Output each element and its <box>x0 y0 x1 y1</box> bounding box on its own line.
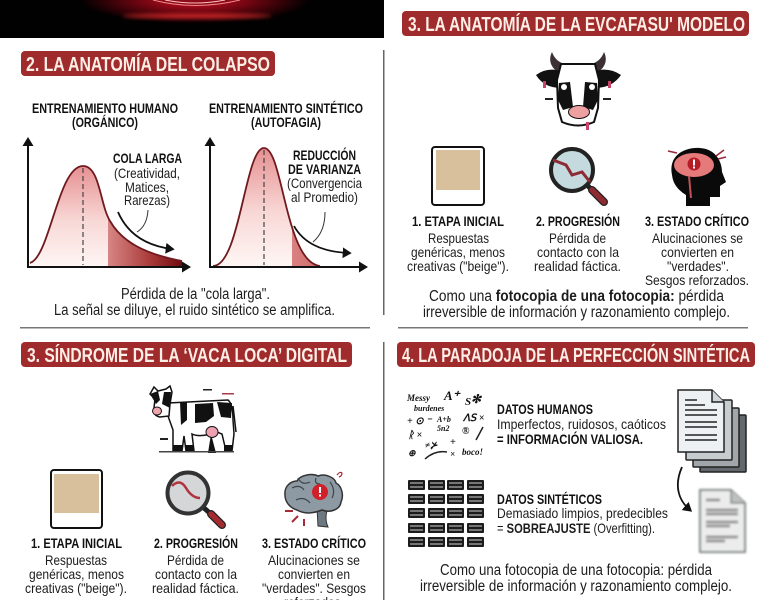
stage 3 text <box>645 213 749 288</box>
icon: grid of identical rows <box>408 480 484 547</box>
icon: stacked documents <box>678 390 746 472</box>
icon: magnifier <box>551 149 604 202</box>
icon: glitched cow head <box>536 52 621 130</box>
chart title: entrenamiento sintético: (AUTOFAGIA) <box>251 114 321 130</box>
header banner: red glow on black <box>0 0 384 38</box>
caption: pérdida de la cola larga: Pérdida de la "cola larga". <box>121 286 270 303</box>
icon: messy handwritten scribbles: ⊕ <box>408 448 416 458</box>
icon: messy handwritten scribbles: × <box>450 449 455 459</box>
callout: cola larga: Rarezas) <box>124 192 170 208</box>
icon: messy handwritten scribbles: 5n2 <box>437 424 449 433</box>
stage 1 text: 1. ETAPA INICIAL <box>31 535 122 551</box>
stage 3 text: convierten en <box>661 244 734 260</box>
panel: paradox of synthetic perfection <box>397 342 755 595</box>
icon: messy handwritten scribbles: burdenes <box>414 404 444 413</box>
caption: fotocopia <box>423 288 730 321</box>
panel: mad cow syndrome <box>21 342 366 600</box>
stage 1 text: Respuestas <box>45 552 107 568</box>
stage 3 text: Alucinaciones se <box>652 230 743 246</box>
text: datos humanos <box>497 401 666 447</box>
stage 1 text: Respuestas <box>428 230 489 246</box>
stage 3 text: convierten en <box>278 566 350 582</box>
callout: cola larga: Matices, <box>125 179 169 195</box>
icon: messy handwritten scribbles: Messy <box>406 393 431 403</box>
chart title: entrenamiento humano <box>32 100 178 130</box>
icon: messy handwritten scribbles: ✻ <box>471 392 482 406</box>
stage 3 text: Sesgos reforzados. <box>645 272 749 288</box>
stage 1 text: creativas ("beige"). <box>407 258 509 274</box>
stage 2 text: Pérdida de <box>549 230 606 246</box>
icon: messy handwritten scribbles: A+b <box>436 415 451 424</box>
stage 1 text: genéricas, menos <box>29 566 124 582</box>
caption: pérdida de la cola larga: La señal se diluye, el ruido sintético se amplifica. <box>54 302 335 319</box>
text: datos sintéticos: DATOS SINTÉTICOS <box>497 491 602 507</box>
callout: reducción de varianza: REDUCCIÓN <box>293 146 356 163</box>
chart title: entrenamiento humano: (ORGÁNICO) <box>72 114 138 130</box>
icon: glitched cow <box>150 386 236 453</box>
icon: messy handwritten scribbles: S <box>465 396 471 408</box>
text: datos humanos: Imperfectos, ruidosos, caóticos <box>497 416 666 432</box>
stage 1 text: 1. ETAPA INICIAL <box>412 213 504 229</box>
callout: reducción de varianza <box>287 146 362 242</box>
chart: synthetic distribution curve <box>204 137 368 272</box>
callout: cola larga: (Creatividad, <box>114 165 180 181</box>
stage 3 text: 3. ESTADO CRÍTICO <box>262 535 366 551</box>
chart title: entrenamiento humano: ENTRENAMIENTO HUMANO <box>32 100 178 116</box>
stage 2 text <box>534 212 621 274</box>
stage 3 text: "verdades". Sesgos <box>262 580 366 596</box>
icon: messy handwritten scribbles: ꓥꓢ × <box>462 413 485 424</box>
arrow: documents to blurred copy <box>678 467 690 510</box>
text: datos sintéticos: Demasiado limpios, predecibles <box>497 505 668 521</box>
stage 1 text: genéricas, menos <box>411 244 505 260</box>
stage 2 text: realidad fáctica. <box>534 258 621 274</box>
callout: cola larga <box>113 150 182 232</box>
callout: reducción de varianza: DE VARIANZA <box>288 161 361 177</box>
caption: fotocopia <box>420 562 732 595</box>
stage 2 text: Pérdida de <box>167 552 224 568</box>
chart: organic distribution curve <box>22 137 191 272</box>
icon: messy handwritten scribbles: ® <box>462 426 470 437</box>
text: datos sintéticos: = SOBREAJUSTE (Overfitting). <box>497 520 655 536</box>
callout: cola larga: COLA LARGA <box>113 150 182 166</box>
stage 3 text: Alucinaciones se <box>268 552 360 568</box>
callout: reducción de varianza: al Promedio) <box>291 189 358 205</box>
icon: messy handwritten scribbles: + <box>450 437 456 448</box>
stage 3 text: "verdades". <box>667 258 729 274</box>
icon: head with brain alert <box>668 148 726 206</box>
icon: messy handwritten scribbles: + ⊙ ⁻ <box>407 416 433 427</box>
stage 1 text <box>407 213 509 274</box>
stage 1 text <box>25 535 127 596</box>
heading: síndrome de la vaca loca digital: 3. SÍNDROME DE LA ‘VACA LOCA’ DIGITAL <box>27 344 347 367</box>
caption: fotocopia: Como una fotocopia de una fotocopia: pérdida <box>440 562 712 579</box>
chart title: entrenamiento sintético <box>209 100 363 130</box>
text: datos sintéticos <box>497 491 668 536</box>
icon: messy handwritten scribbles <box>406 388 485 459</box>
icon: magnifier <box>168 472 222 525</box>
callout: reducción de varianza: (Convergencia <box>287 175 362 191</box>
panel: anatomy of collapse <box>21 51 368 319</box>
icon: messy handwritten scribbles: ≠⊁ <box>425 440 438 450</box>
icon: messy handwritten scribbles: boco! <box>462 447 483 457</box>
arrow: variance direction <box>294 226 349 253</box>
icon: messy handwritten scribbles: A⁺ <box>443 388 462 403</box>
text: datos humanos: DATOS HUMANOS <box>497 401 593 417</box>
icon: messy handwritten scribbles: ᚱ × <box>408 429 422 441</box>
stage 2 text <box>152 534 239 596</box>
stage 1 text: creativas ("beige"). <box>25 580 127 596</box>
caption: pérdida de la cola larga <box>54 286 335 319</box>
icon: beige photo <box>51 470 102 528</box>
text: datos humanos: = INFORMACIÓN VALIOSA. <box>497 430 643 447</box>
icon: brain with alert <box>285 472 342 527</box>
stage 2 text: contacto con la <box>537 244 619 260</box>
arrow: long tail direction <box>118 212 172 249</box>
icon: blurred document <box>700 490 745 552</box>
stage 2 text: 2. PROGRESIÓN <box>154 534 238 551</box>
stage 2 text: realidad fáctica. <box>152 580 239 596</box>
caption: fotocopia: Como una fotocopia de una fotocopia: pérdida <box>429 288 724 305</box>
panel: model anatomy <box>402 11 749 321</box>
stage 2 text: 2. PROGRESIÓN <box>536 212 620 229</box>
heading: la anatomía del colapso: 2. LA ANATOMÍA DEL COLAPSO <box>26 53 270 76</box>
stage 2 text: contacto con la <box>155 566 237 582</box>
icon: beige photo <box>432 147 484 205</box>
stage 3 text <box>262 535 366 600</box>
chart title: entrenamiento sintético: ENTRENAMIENTO SINTÉTICO <box>209 100 363 116</box>
